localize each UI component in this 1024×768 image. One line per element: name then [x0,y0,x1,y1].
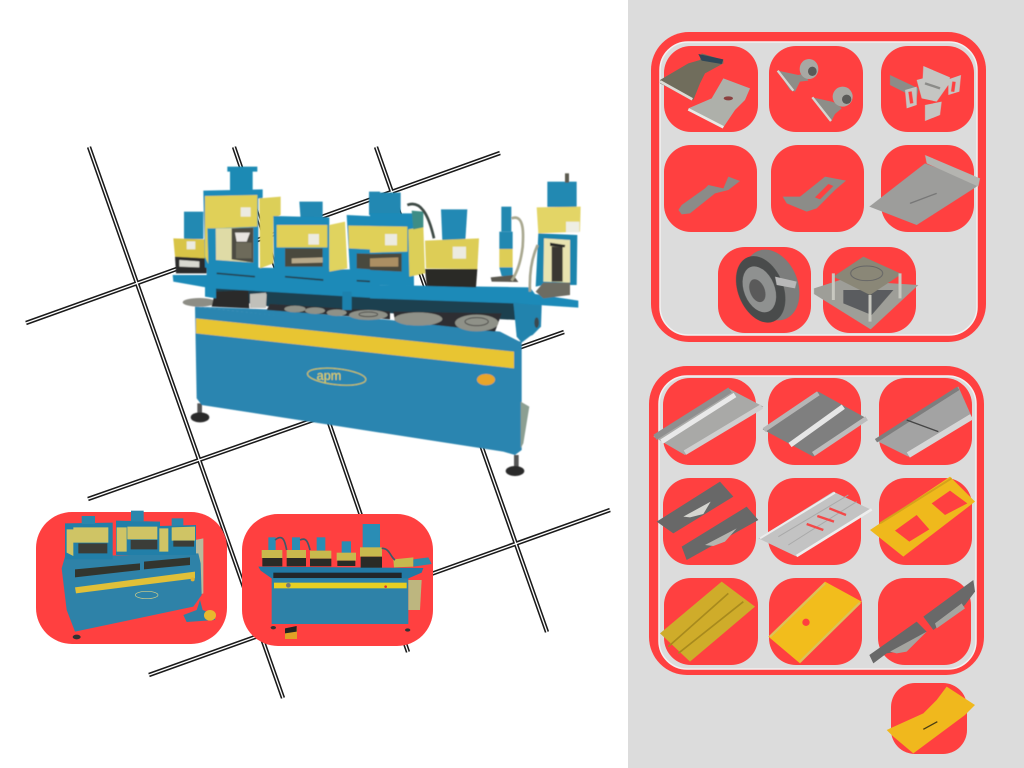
part: yellow clip [887,687,975,753]
part: yellow drilled plate [768,582,862,663]
yellow stripe [196,318,514,368]
part: hinge pair [778,59,853,122]
cabinet logo: apm [317,369,341,383]
deck front band [195,307,522,343]
machine photo A [62,511,216,639]
right vertical press 7 [530,173,581,298]
photo tile: three-press machine [36,511,227,644]
part: clip pair [660,53,750,127]
shelf slots [217,273,380,282]
part: folded bracket [890,66,961,121]
cabinet logo [307,366,367,388]
oil can [250,294,267,308]
shelf and frame block left [173,267,380,298]
shelf end gusset [513,303,542,340]
part: flanged plate [869,155,980,225]
part: plate assembly [814,257,918,329]
small press 1 [173,212,207,273]
rotary plate left [183,298,216,307]
part: dark channel pair [657,482,758,560]
machine upper left: presses 1 to 3 [173,167,380,310]
part: yellow plate with windows [870,477,975,557]
tooling tray with discs [267,304,502,332]
part: drum [727,241,810,330]
part: dark bracket pair [869,580,975,663]
press 3 [273,202,347,276]
background line grid [26,147,610,698]
right grey panel background [628,0,1024,768]
machine lower body [183,278,542,476]
part: silver profile 1 [653,388,763,455]
part: silver profile 2 [763,392,867,457]
part: slotted bracket [783,177,846,212]
cabinet badge [477,374,495,385]
right end block [513,302,542,343]
part: flat strap [678,177,740,214]
press 5 [425,209,479,287]
machine feet [191,403,524,476]
machine upper right: presses 4 to 7 [370,173,581,340]
machine cabinet [195,307,522,455]
dark tool parts on deck [212,278,266,308]
slim press 6 [491,207,523,282]
deck column [342,292,352,310]
shelf leg [205,282,216,298]
part tiles [664,46,974,333]
photo tile: five-press machine [242,514,433,646]
large press 2 [203,167,281,271]
panel: upper parts group [651,32,986,342]
part: light profile with red slots [758,492,872,557]
standalone part tile [887,683,975,754]
photo: main blue press machine [173,167,581,476]
part: silver profile 3 [875,387,972,457]
part: olive yellow channel [660,582,755,662]
press 4 left part [347,192,380,275]
part drawings upper, remaining [678,66,980,330]
under-shelf shadow [207,282,517,320]
part drawings lower [653,387,975,663]
shelf right [370,285,578,308]
panel: lower parts group [649,366,984,675]
press 4 right part [370,193,434,286]
side electrical panel [521,402,529,448]
part tiles [663,378,972,665]
machine photo B [258,524,432,639]
